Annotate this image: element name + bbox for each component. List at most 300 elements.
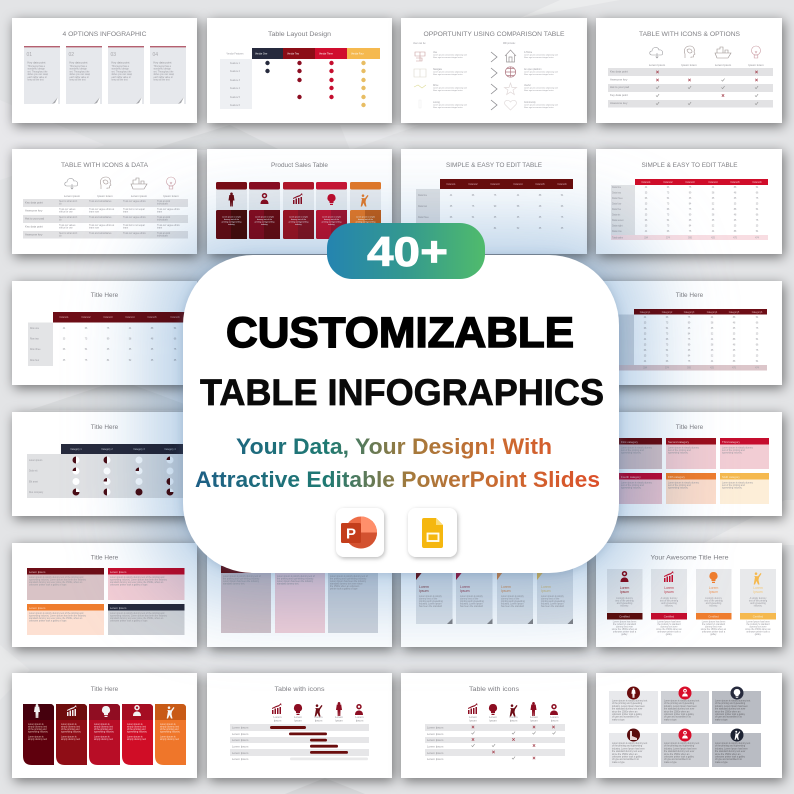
table body: 35 <box>644 334 647 336</box>
card 2: industry. Lorem Ipsum has been <box>664 705 697 708</box>
card 1: industry. Lorem Ipsum <box>419 602 442 606</box>
table body: 35 <box>688 350 691 352</box>
card 3: make a type. <box>715 718 729 721</box>
table body: 66 <box>85 328 88 330</box>
table rows: Lorem Ipsum <box>427 732 444 736</box>
table body: 75 <box>667 226 670 228</box>
table body: 35 <box>151 360 154 362</box>
table rows: Awesome key <box>610 101 628 105</box>
column icons: Lorem Ipsum <box>715 63 732 67</box>
card 2: make a type. <box>664 718 678 721</box>
card 3: Lorem <box>709 586 718 590</box>
card 1: unknown printer took a galley <box>612 713 643 716</box>
table data: team <box>157 226 162 229</box>
columns: the printing and typesetting industry. <box>277 578 314 580</box>
table data: Trust at work <box>157 233 170 235</box>
card 6: of the printing and typesetting <box>715 745 746 748</box>
column icons: Lorem <box>510 715 517 719</box>
card 4: Lorem <box>753 586 763 590</box>
left text: Lorem ipsum consectetur adipiscing sed <box>433 87 467 90</box>
card 3: since the 1500s when an <box>715 710 741 713</box>
table body: 66 <box>667 187 670 189</box>
table body: 99 <box>494 206 497 208</box>
column icons: Lorem ipsum <box>131 194 148 198</box>
table body: 52 <box>712 204 715 206</box>
table data: Trust and subsidiaries <box>89 232 112 235</box>
slide: table with icons gantt <box>207 673 392 778</box>
card 3: unknown printer took a galley <box>715 713 746 716</box>
table rows <box>230 724 369 761</box>
heading: table infographics: TABLE INFOGRAPHICS <box>200 371 604 413</box>
column icons <box>272 702 364 722</box>
table header: Column5 <box>535 184 545 186</box>
card 2 <box>456 565 492 624</box>
table body: 58 <box>712 192 715 194</box>
column 4: printing and typesetting <box>322 220 341 224</box>
heading: Title Here <box>676 292 704 299</box>
block navy: standard dummy text ever since the 1500s, when an <box>110 617 164 620</box>
card 3: the industry's standard <box>702 623 726 626</box>
card 2: of the printing and typesetting <box>664 702 695 705</box>
card 02: keep all the text <box>70 78 86 82</box>
table data: team <box>157 210 162 213</box>
table header: Column6 <box>170 317 180 319</box>
table body: Row four <box>30 359 39 362</box>
block: sixth category: Lorem ipsum is simply dummy <box>722 482 753 484</box>
card 02: each table value or <box>70 76 89 79</box>
column 5 <box>155 704 186 765</box>
slide: five shaped columns <box>12 673 197 778</box>
table body: 75 <box>689 187 692 189</box>
left text: Use <box>433 52 437 54</box>
table body: 66 <box>666 317 669 319</box>
columns: printer took a galley of type <box>330 588 358 590</box>
right text: Useful <box>524 85 531 87</box>
columns: the printing and typesetting industry. <box>330 578 367 580</box>
left text: Lorem ipsum consectetur adipiscing sed <box>433 104 467 107</box>
heading: Table with icons <box>469 686 519 693</box>
slide: title here dense table <box>596 281 782 385</box>
card 5 <box>661 728 709 767</box>
table header: Column1 <box>446 184 456 186</box>
central white card <box>183 255 619 573</box>
table rows: Awesome key <box>25 232 43 236</box>
column 1: typesetting industry <box>28 730 49 734</box>
table data: individuals <box>157 219 169 221</box>
table body: 425 <box>711 238 716 240</box>
table body: 99 <box>688 344 691 346</box>
table body <box>416 189 564 233</box>
card 6: since the 1500s when an <box>715 753 741 756</box>
column 4 <box>316 182 347 239</box>
card 3: galley. <box>710 634 717 636</box>
column 5: Lorem ipsum is <box>160 736 176 738</box>
table body: 35 <box>733 328 736 330</box>
table body: 54 <box>666 328 669 330</box>
column 2: simply dummy text <box>61 726 80 728</box>
heading: Table with icons <box>274 686 324 693</box>
table body: 75 <box>666 334 669 336</box>
card 4 <box>537 565 573 624</box>
column icons: Ipsum <box>530 718 538 722</box>
table data: individuals <box>157 203 169 205</box>
card 1: the industry's standard <box>613 623 637 626</box>
table body: Duo company <box>29 492 44 494</box>
column 2: simply dummy text <box>61 738 80 741</box>
table body: 75 <box>667 192 670 194</box>
table body: 35 <box>63 338 66 340</box>
table body: 66 <box>666 361 669 363</box>
table body: 35 <box>734 226 737 228</box>
table header: Category6 <box>752 311 763 314</box>
left text: Nunc eget accumsan integer lectus <box>433 73 463 76</box>
card 03: slides you can swap <box>112 74 133 76</box>
table rows: Lorem Ipsum <box>427 726 444 730</box>
right text: Lorem ipsum consectetur adipiscing sed <box>524 104 558 107</box>
table body: 35 <box>517 217 520 219</box>
card 1: Certified <box>619 614 630 618</box>
column 4: Lorem ipsum is simple <box>322 216 341 218</box>
table rows <box>608 68 773 108</box>
table body <box>27 454 185 498</box>
table body: 35 <box>561 228 564 230</box>
card 03: keep all the text <box>112 78 128 82</box>
card 6: industry. Lorem Ipsum has been <box>715 747 748 750</box>
table rows <box>23 199 188 238</box>
column icons: Ipsum <box>469 718 477 722</box>
table body: 52 <box>711 356 714 358</box>
table body: 75 <box>107 328 110 330</box>
table body: 44 <box>645 209 648 211</box>
table body: 35 <box>734 220 737 222</box>
table body: 54 <box>174 328 177 330</box>
right text: An open platform <box>524 69 542 71</box>
card 02 <box>66 46 102 104</box>
columns: the 1500s when an unknown <box>330 585 360 588</box>
card 3: has been the standard <box>501 605 525 608</box>
column icons: Ipsum lorem <box>97 194 113 198</box>
column 5: simply dummy text <box>160 726 179 728</box>
card 4: industry. Lorem Ipsum <box>541 602 564 606</box>
table body: 66 <box>667 231 670 233</box>
table rows: Lorem Ipsum <box>427 757 444 761</box>
block: fourth category: Fourth category <box>621 475 641 479</box>
table body: 66 <box>667 209 670 211</box>
slide: table with icons and options <box>596 18 782 123</box>
left text: Nunc eget accumsan integer lectus <box>433 89 463 92</box>
table body: 66 <box>645 220 648 222</box>
table body: 58 <box>129 338 132 340</box>
column 3: Lorem ipsum is <box>94 724 110 726</box>
card 1: Ipsum <box>620 590 629 594</box>
table header: Category2 <box>662 311 673 314</box>
card 3: Ipsum <box>709 590 718 594</box>
table body: 88 <box>734 187 737 189</box>
heading: Your Awesome Title Here <box>650 554 729 562</box>
card 2: since the 1500s when an <box>656 628 682 631</box>
table body: 66 <box>472 195 475 197</box>
card 1: since the 1500s when an <box>612 710 638 713</box>
table body: 75 <box>85 338 88 340</box>
column 4: typesetting industry <box>127 730 148 734</box>
table body: 99 <box>688 322 691 324</box>
table body: 99 <box>689 192 692 194</box>
card 3: unknown printer took a <box>702 630 726 634</box>
column 5 <box>350 182 381 239</box>
table body: 54 <box>756 317 759 319</box>
card 02: This layout has a <box>70 66 87 68</box>
table data: Trust but to not equal <box>123 209 145 211</box>
badge: 40+: 40+ <box>367 228 448 275</box>
table header: Category3 <box>684 311 695 314</box>
table body: 75 <box>174 349 177 351</box>
heading: SIMPLE & EASY TO EDIT TABLE <box>642 162 738 169</box>
column 5: typesetting industry <box>160 730 181 734</box>
table body: Data two <box>418 205 428 208</box>
column icons <box>64 177 179 198</box>
card 3: the standard dummy text ever <box>715 708 746 711</box>
card 5: of the printing and typesetting <box>664 745 695 748</box>
table body: 75 <box>666 322 669 324</box>
block orange: unknown printer took a galley of type. <box>29 620 67 622</box>
subtitle line 2: Attractive Editable PowerPoint Slides <box>195 467 600 492</box>
card 2: printing and typesetting <box>460 600 484 603</box>
table body: 35 <box>689 198 692 200</box>
table body: 35 <box>756 356 759 358</box>
table body: 35 <box>756 204 759 206</box>
table body: 595 <box>688 238 693 240</box>
table body: Data nine <box>612 230 623 233</box>
table rows: Awesome key <box>610 78 628 82</box>
right text: Lorem ipsum consectetur adipiscing sed <box>524 71 558 74</box>
left icons <box>414 52 426 108</box>
card 1: and typesetting <box>617 602 633 605</box>
table data: Trust and subsidiaries <box>89 200 112 203</box>
table data: team <box>123 226 128 229</box>
column 2 <box>249 182 280 239</box>
card 5: since the 1500s when an <box>664 753 690 756</box>
table body: 54 <box>756 339 759 341</box>
column 4: Lorem ipsum is <box>127 736 143 738</box>
columns: Lorem Ipsum has been the industry <box>223 580 260 583</box>
card 6: make a type. <box>715 761 729 764</box>
columns: Lorem Ipsum has been the industry <box>277 580 314 583</box>
table header: Category5 <box>729 311 740 314</box>
card 5: Lorem ipsum is simply dummy text <box>664 743 699 745</box>
table body: 35 <box>734 198 737 200</box>
table body: 35 <box>494 217 497 219</box>
table body: 474 <box>755 238 760 240</box>
table header: Vendor One <box>255 52 268 56</box>
block navy: Lorem ipsum is simply dummy text of the printing and <box>110 613 164 615</box>
harvey balls <box>72 456 174 496</box>
column 3: of the printing and <box>94 728 113 731</box>
column 1 <box>216 182 247 239</box>
table body: 48 <box>151 338 154 340</box>
heading: 4 OPTIONS INFOGRAPHIC <box>62 31 147 38</box>
card 1: since the 1500s when an <box>612 628 638 631</box>
table body: 44 <box>644 339 647 341</box>
block: second category: text of the printing and <box>668 449 691 452</box>
block: sixth category: Sixth category <box>722 475 740 479</box>
table body: Dolor sit <box>29 470 38 472</box>
table body: 44 <box>711 317 714 319</box>
subtitle line 1: Your Data, Your Design! With <box>236 434 552 459</box>
column 3 <box>283 182 314 239</box>
card 4: Lorem Ipsum has been <box>746 622 770 624</box>
card 3 <box>497 565 533 624</box>
right text: Nunc eget accumsan integer lectus <box>524 106 554 109</box>
table rows: Hat to your pad <box>25 216 45 220</box>
card 4: A simply dummy <box>750 598 766 600</box>
table body: 35 <box>107 349 110 351</box>
card 2: industry. Lorem Ipsum <box>460 602 483 606</box>
table body: 75 <box>666 356 669 358</box>
table data: Trust our values <box>59 225 75 227</box>
card 5: industry. Lorem Ipsum has been <box>664 747 697 750</box>
table body: 54 <box>561 195 564 197</box>
card 4: Lorem ipsum is simply <box>541 596 564 598</box>
column 3: industry. <box>295 223 302 226</box>
card 1: Lorem Ipsum has been <box>613 622 636 624</box>
table rows: Key data point <box>610 70 628 74</box>
column 1: Lorem ipsum is simple <box>222 216 241 218</box>
table body: 66 <box>756 192 759 194</box>
table header: Category 3 <box>133 448 145 451</box>
table data: do <box>59 219 62 221</box>
card 1: of type and scrambled it to <box>612 716 640 719</box>
right text <box>524 51 558 109</box>
table body: Data three <box>418 216 429 219</box>
table header: Column5 <box>730 182 740 184</box>
gantt bars <box>270 726 368 760</box>
table body: Data line <box>418 194 428 197</box>
table body: 58 <box>711 344 714 346</box>
slide: table with icons check marks <box>401 673 587 778</box>
arrows <box>491 52 497 110</box>
table body: Data four <box>418 227 428 230</box>
table data: Trust our vague ethics <box>123 232 146 235</box>
table rows: Key data point <box>610 93 628 97</box>
table header: Category 1 <box>70 448 82 451</box>
column 2 <box>56 704 87 765</box>
table body: 54 <box>85 349 88 351</box>
card 4: dummy text ever <box>750 626 767 628</box>
table header: Column6 <box>752 182 762 184</box>
table header <box>440 179 573 189</box>
card 1: has been the standard <box>419 605 443 608</box>
table body: 54 <box>667 198 670 200</box>
table data: team now <box>89 210 99 213</box>
column icons: Ipsum <box>315 718 323 722</box>
slide: four lorem ipsum blocks <box>12 543 197 647</box>
column 5: simply dummy text <box>160 738 179 741</box>
table body: 75 <box>756 198 759 200</box>
table body: 35 <box>151 349 154 351</box>
table body <box>611 185 768 240</box>
table body: 35 <box>63 360 66 362</box>
block: fifth category: typesetting industry. <box>668 487 689 490</box>
column icons: Lorem <box>551 715 558 719</box>
card 2: text of the printing <box>660 600 679 602</box>
card 4: dummy text of the <box>541 598 560 600</box>
column 3: Lorem ipsum is simple <box>289 216 308 218</box>
right text: Nunc eget accumsan integer lectus <box>524 73 554 76</box>
column 1: Lorem ipsum is <box>28 724 44 726</box>
column 2: of the printing and <box>61 728 80 731</box>
card 2: Lorem Ipsum has been <box>657 622 681 624</box>
table body: 75 <box>688 317 691 319</box>
column 3: printing and typesetting <box>289 220 308 224</box>
table data: Next to what don't <box>59 217 77 219</box>
card 3: of the printing and typesetting <box>715 702 746 705</box>
card 01: keep all the text <box>28 78 44 82</box>
table body: 595 <box>687 368 692 370</box>
table body: 58 <box>711 322 714 324</box>
card 3: A simply dummy <box>705 598 722 600</box>
feature column: Feature 2 <box>230 70 241 73</box>
block: fourth category <box>611 473 662 504</box>
table body: 48 <box>734 192 737 194</box>
slide: six icon text cards <box>596 673 782 778</box>
card 1: make a type. <box>612 718 626 721</box>
table data: Next to what don't <box>59 201 77 203</box>
card 1: Lorem <box>620 586 629 590</box>
icon: powerpoint <box>336 508 384 557</box>
table body: 66 <box>450 217 453 219</box>
table header: Column2 <box>81 317 91 319</box>
block: second category: Lorem ipsum is simply dummy <box>668 448 699 450</box>
card 4: unknown printer took a galley <box>612 756 643 758</box>
card 2: unknown printer took a galley <box>664 713 695 716</box>
feature column: Feature 3 <box>230 79 241 82</box>
columns <box>221 560 378 633</box>
card 5: unknown printer took a galley <box>664 756 695 758</box>
card 3: Certified <box>708 614 719 618</box>
table body: 75 <box>689 231 692 233</box>
card 01 <box>24 46 60 104</box>
table body: 75 <box>688 339 691 341</box>
block: first category: text of the printing and <box>621 449 644 452</box>
column 4: of the printing and <box>127 728 146 731</box>
card 04: This layout has a <box>154 66 171 68</box>
right icons <box>504 50 516 110</box>
heading: OPPORTUNITY USING COMPARISON TABLE <box>424 31 564 38</box>
table rows: Key data point <box>25 200 43 204</box>
card 2: the industry's standard <box>657 623 681 626</box>
table data: Trust our values <box>59 209 75 211</box>
slide: three tall columns <box>207 543 392 647</box>
card 1 <box>416 565 452 624</box>
column icons: Lorem <box>489 715 497 719</box>
table body: 88 <box>539 195 542 197</box>
block: first category: Lorem ipsum is simply dummy <box>621 448 652 450</box>
column icons: Ipsum <box>356 718 364 722</box>
columns: standard dummy text ever since <box>330 582 363 586</box>
table body: 48 <box>733 322 736 324</box>
block: fourth category: typesetting industry. <box>621 487 642 490</box>
table body: 52 <box>712 226 715 228</box>
table header: Vendor Three <box>319 52 334 56</box>
card 1: A simply dummy <box>616 598 633 600</box>
card 1: Lorem ipsum is simply dummy text <box>612 700 647 702</box>
column 5: printing and typesetting <box>356 220 375 224</box>
table body: 66 <box>644 350 647 352</box>
slide: your awesome title here <box>596 543 782 647</box>
card 03: wonderful design <box>112 68 130 71</box>
table body: 66 <box>561 206 564 208</box>
table body: 44 <box>645 231 648 233</box>
